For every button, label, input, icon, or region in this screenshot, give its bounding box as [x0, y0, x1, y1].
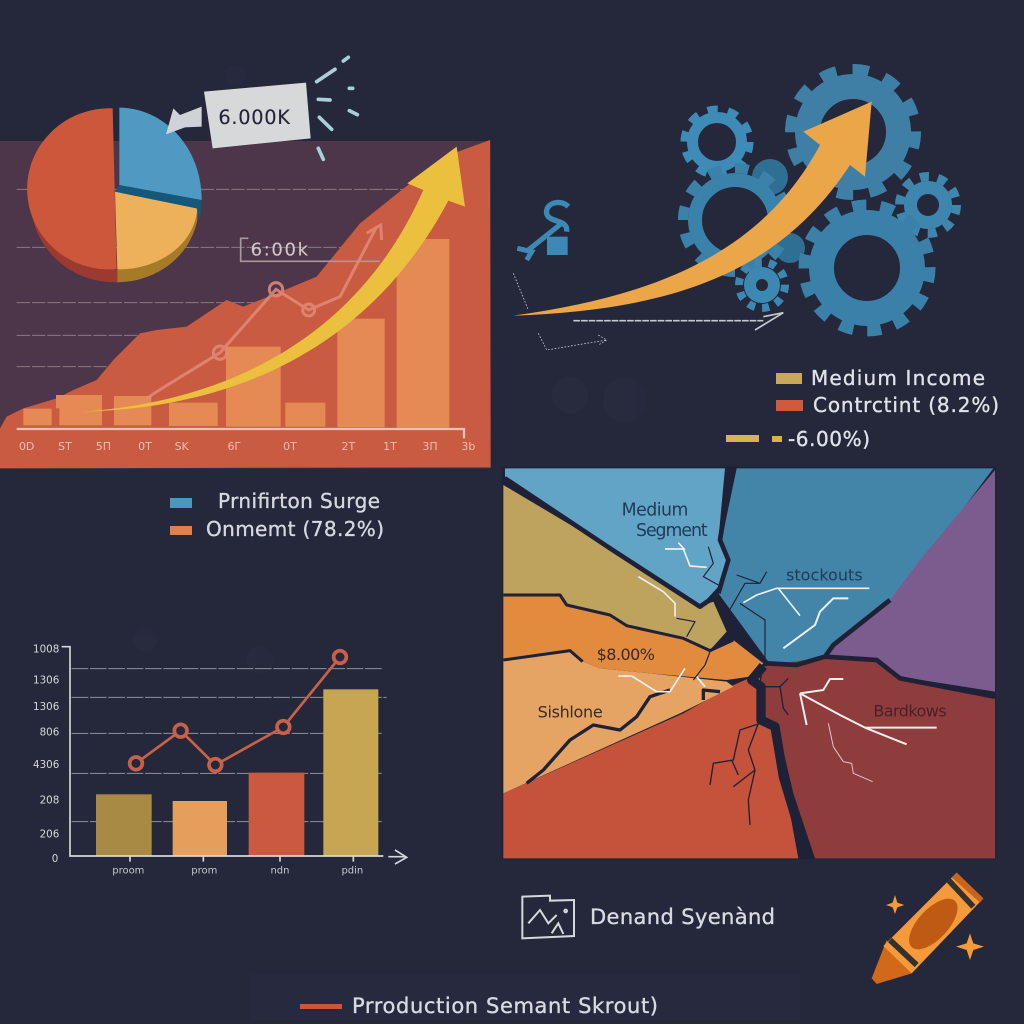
gear: middle — [683, 168, 787, 272]
segment labels: stockouts — [786, 566, 863, 585]
callout: 6:00k — [241, 238, 380, 261]
tick labels: 1306 — [33, 674, 59, 686]
icon: lock and key — [517, 202, 568, 260]
gear: small top left — [684, 109, 750, 175]
axis and tick labels: SK — [175, 440, 190, 453]
segment: olive — [503, 485, 727, 650]
gear: dark behind — [752, 159, 805, 263]
bars — [96, 689, 378, 856]
axis and tick labels: 5Π — [96, 440, 111, 453]
axis and tick labels — [17, 429, 475, 453]
segment labels — [538, 500, 947, 721]
segment: sishlone — [503, 652, 733, 793]
icon: crayon — [872, 873, 984, 984]
callout: 6:00k: 6:00k — [251, 239, 309, 260]
axis and tick labels: 0T — [138, 440, 152, 453]
legend: medium income: -6.00%) — [788, 427, 870, 451]
tick labels: 4306 — [33, 759, 59, 771]
axis and tick labels: 0D — [19, 440, 34, 453]
segment: orange — [503, 593, 763, 680]
callout: 6.000K: 6.000K — [218, 106, 291, 129]
axis and tick labels: 0T — [283, 440, 297, 453]
axis and tick labels: ST — [58, 440, 72, 453]
tick labels: 206 — [40, 828, 59, 840]
axis and tick labels: 3Π — [422, 440, 438, 453]
panel: gears with growth arrow — [513, 70, 956, 350]
heading: demand: Denand Syenànd — [590, 905, 775, 929]
segment: medium — [505, 468, 728, 607]
arrow: yellow growth — [83, 147, 465, 412]
bar and line chart — [33, 644, 407, 876]
gear: large top — [791, 70, 915, 194]
segment labels: Segment — [636, 521, 708, 541]
arrow: orange growth — [513, 102, 872, 316]
tick labels: 806 — [40, 726, 59, 738]
segment: stockouts — [717, 468, 993, 665]
segment labels: $8.00% — [597, 645, 655, 664]
trend line — [130, 651, 346, 771]
legend: medium income: Medium Income — [811, 366, 985, 390]
tick labels: 208 — [40, 794, 59, 806]
footer legend: Prroduction Semant Skrout) — [352, 994, 658, 1018]
panel: production surge area chart — [0, 57, 491, 468]
segment labels: Sishlone — [538, 702, 603, 721]
pie chart — [27, 108, 202, 282]
red area — [0, 140, 491, 468]
callout: 6.000K — [166, 83, 311, 148]
axis and tick labels: 3b — [461, 440, 475, 453]
white fissures — [618, 543, 937, 782]
gear: small bottom — [739, 262, 785, 308]
segment: purple — [828, 470, 995, 692]
bar and line chart: pdin — [341, 865, 363, 876]
tick labels: 1306 — [33, 701, 59, 713]
cracks — [503, 468, 995, 858]
legend: production surge: Prnifirton Surge — [218, 489, 380, 513]
bar and line chart: ndn — [270, 865, 289, 876]
bar and line chart: prom — [191, 865, 217, 876]
tick labels: 0 — [52, 853, 58, 865]
panel: fractured segment map — [502, 467, 996, 859]
segment labels: Medium — [622, 500, 688, 520]
segment: bardkows — [760, 657, 995, 858]
legend: medium income: Contrctint (8.2%) — [813, 393, 999, 417]
bars — [23, 239, 449, 428]
tick labels: 1008 — [33, 644, 59, 656]
segment labels: Bardkows — [873, 702, 947, 721]
bar and line chart: proom — [112, 865, 144, 876]
legend: medium income — [726, 366, 999, 451]
arrow: chalk dashed — [513, 273, 783, 350]
axis and tick labels: 2T — [341, 440, 355, 453]
gear: small right — [900, 176, 956, 234]
icon: chart frame — [522, 896, 574, 938]
legend: production surge: Onmemt (78.2%) — [206, 517, 384, 541]
axis and tick labels: 1T — [383, 440, 397, 453]
axis and tick labels: 6Γ — [227, 440, 241, 453]
legend: production surge — [170, 489, 384, 541]
tick labels — [33, 644, 59, 865]
gear: large bottom — [804, 205, 930, 331]
segment: red — [503, 673, 798, 858]
axes — [62, 647, 407, 864]
burst marks — [317, 57, 357, 159]
trend line — [147, 225, 382, 398]
